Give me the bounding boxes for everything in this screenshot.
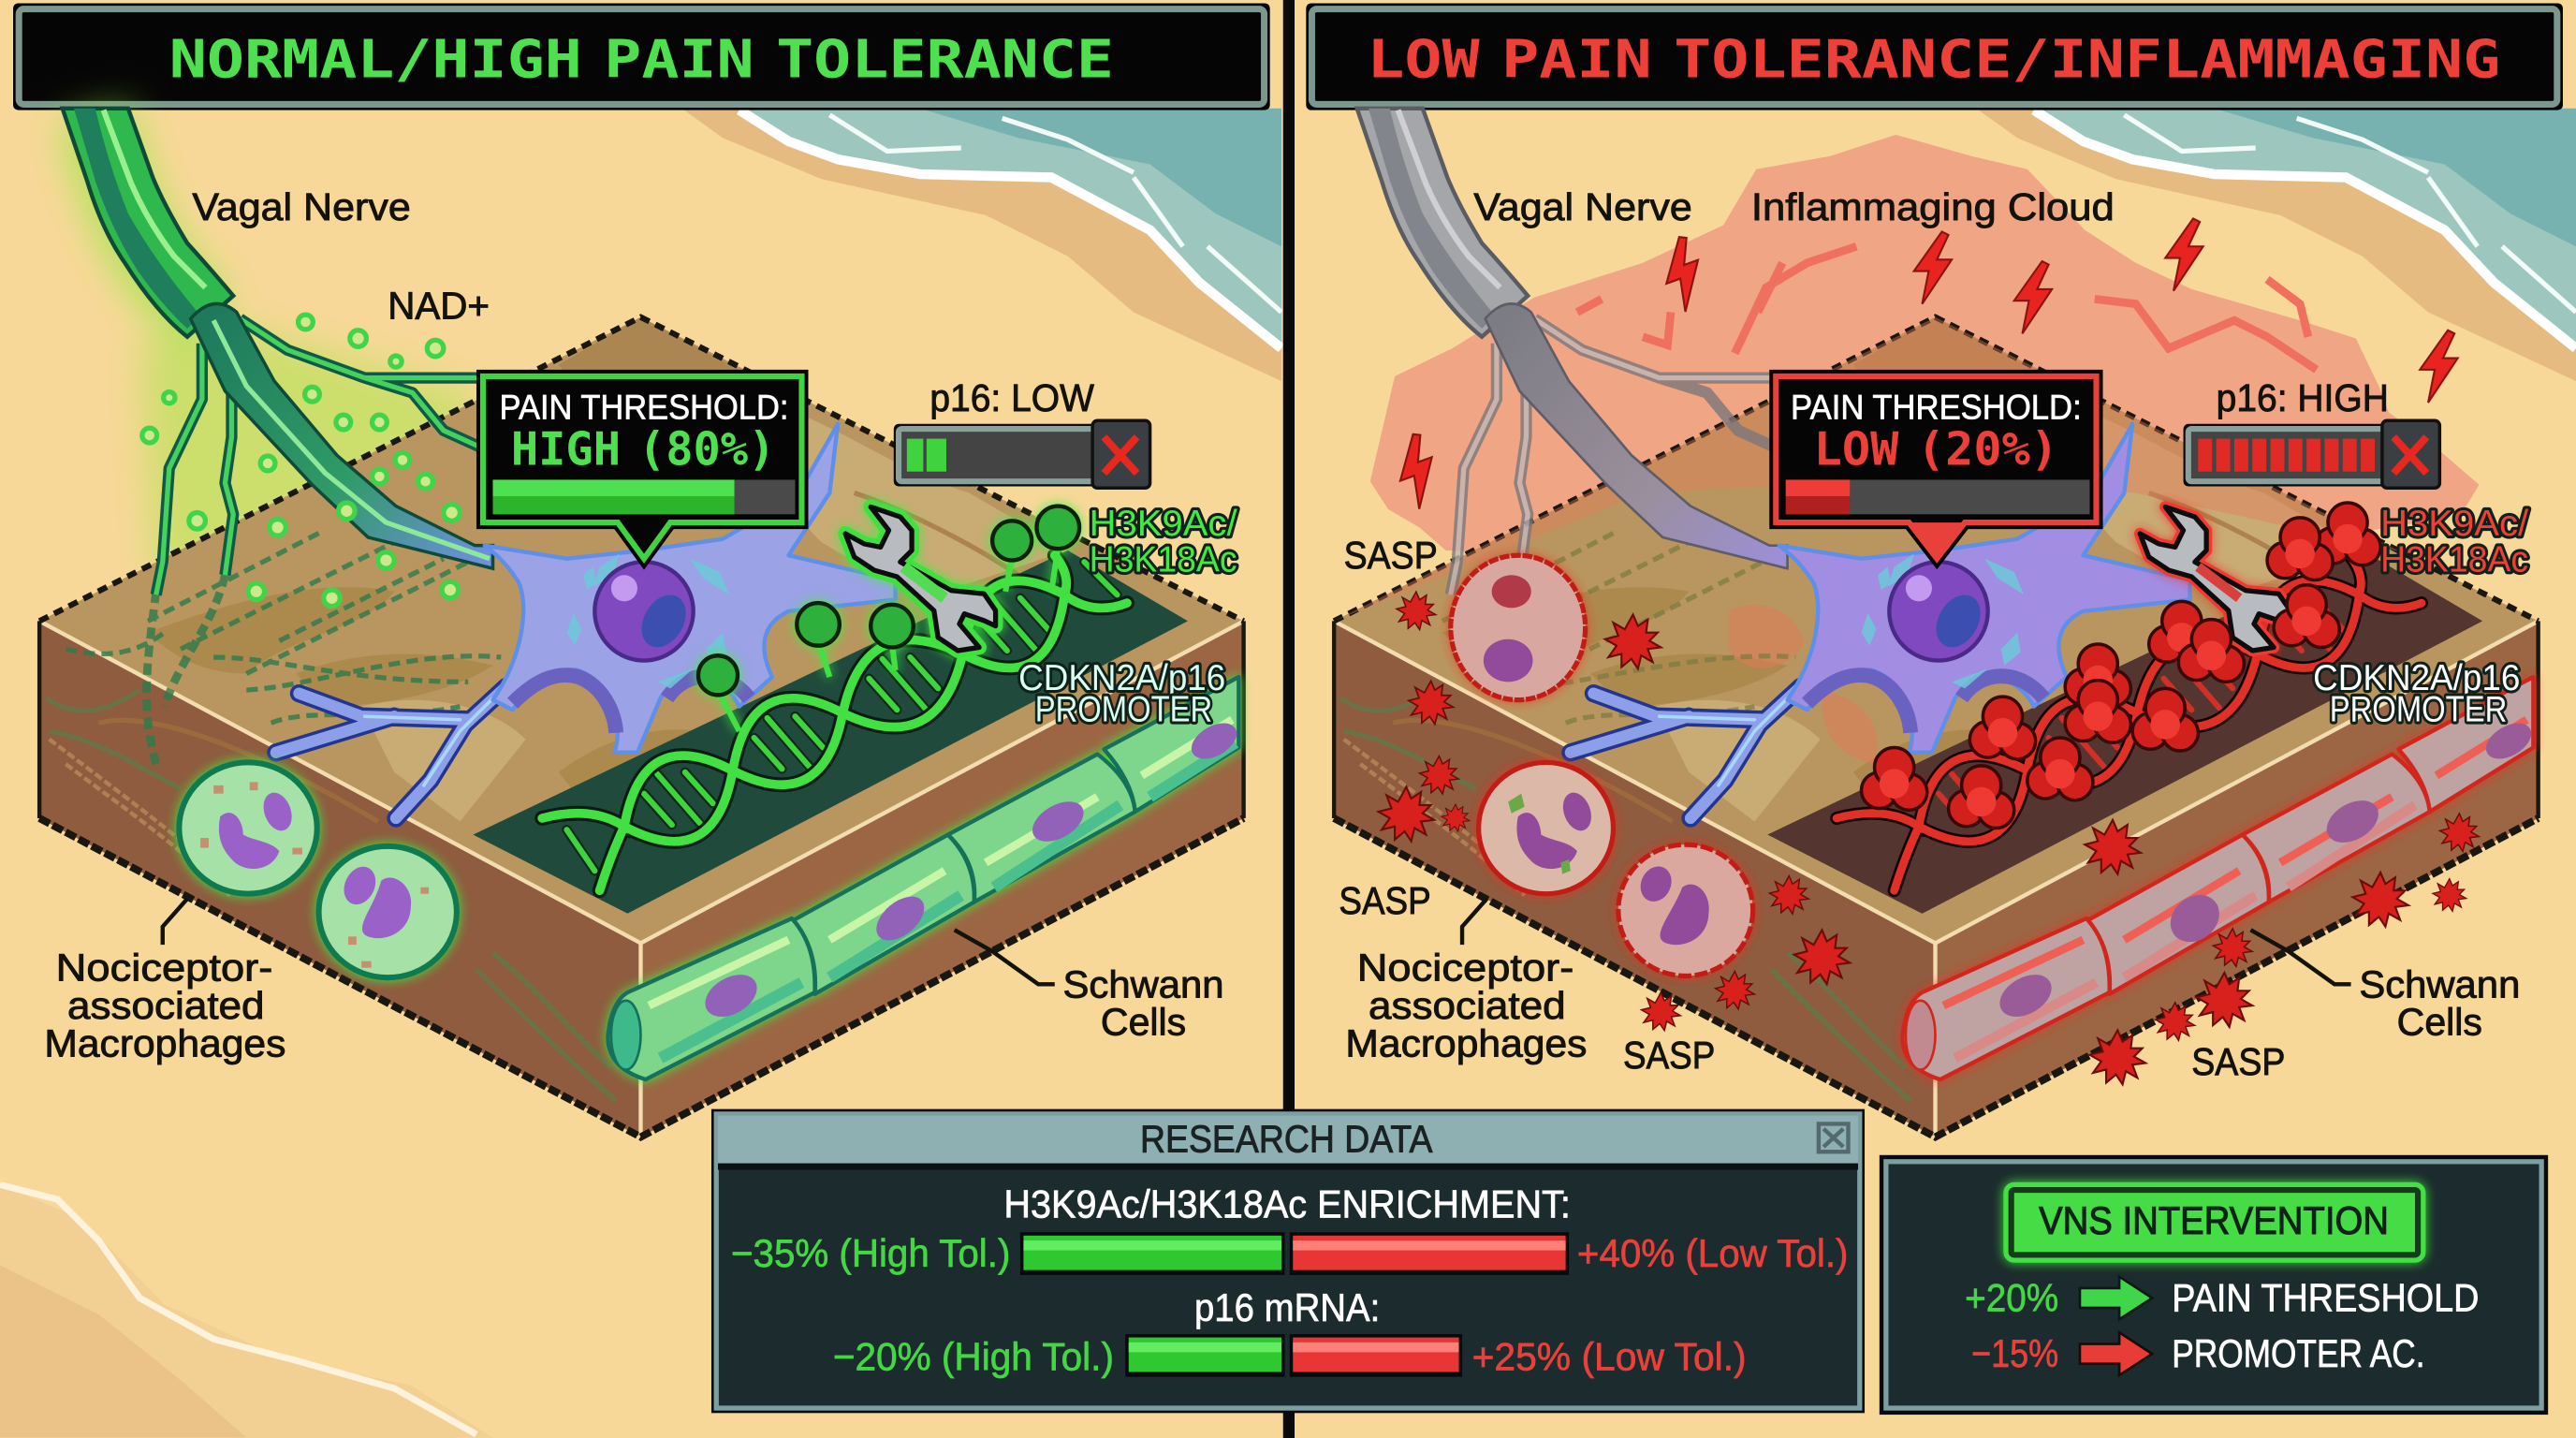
labels: left panel (44, 185, 1237, 1064)
labels: left panel: NAD+ (388, 284, 490, 327)
callout: pain threshold low (1776, 376, 2097, 559)
chart: p16 mRNA: p16 mRNA: (1194, 1285, 1380, 1329)
header: low pain tolerance (1306, 4, 2563, 110)
labels: right panel: Nociceptor- (1357, 946, 1573, 990)
chart: p16 mRNA: +25% (Low Tol.) (1472, 1335, 1747, 1379)
labels: right panel: Schwann (2359, 962, 2520, 1005)
chart: H3K9Ac/H3K18Ac enrichment: −35% (High Tol.) (731, 1231, 1010, 1275)
neuron (276, 424, 896, 818)
vagal nerve, degraded (1357, 109, 1788, 594)
gauge: p16 high: p16: HIGH (2217, 376, 2389, 419)
labels: right panel: CDKN2A/p16 (2313, 658, 2520, 698)
close icon (1819, 1123, 1848, 1152)
labels: right panel: SASP (1339, 879, 1431, 922)
macrophages (179, 762, 457, 977)
damaged DNA helix (1837, 555, 2422, 890)
labels: right panel: H3K9Ac/ (2380, 504, 2528, 544)
button: VNS intervention: VNS INTERVENTION (2039, 1198, 2389, 1242)
labels: right panel: Cells (2397, 1001, 2482, 1044)
panel title: RESEARCH DATA (1140, 1117, 1433, 1160)
panel: low pain tolerance / inflammaging (1306, 4, 2563, 1137)
labels: left panel: Cells (1101, 1001, 1186, 1044)
labels: right panel: Inflammaging Cloud (1751, 185, 2115, 228)
panel: normal/high pain tolerance (13, 4, 1270, 1137)
labels: left panel: CDKN2A/p16 (1018, 658, 1225, 698)
callout: pain threshold high (483, 376, 801, 559)
chart: H3K9Ac/H3K18Ac enrichment: +40% (Low Tol.) (1577, 1231, 1848, 1275)
histones (698, 506, 1079, 731)
labels: right panel: SASP (1623, 1034, 1715, 1077)
stat: pain threshold +20%: +20% (1965, 1276, 2058, 1320)
labels: left panel: Schwann (1063, 962, 1224, 1005)
Schwann cells, inflamed (1902, 677, 2538, 1079)
chart: p16 mRNA: −20% (High Tol.) (833, 1335, 1114, 1379)
neuron (1571, 424, 2190, 818)
stat: pain threshold +20% (1965, 1276, 2479, 1320)
panel: VNS intervention (1880, 1155, 2548, 1415)
stat: pain threshold +20%: PAIN THRESHOLD (2172, 1276, 2479, 1320)
labels: right panel: associated (1368, 984, 1566, 1027)
labels: right panel: H3K18Ac (2380, 540, 2528, 580)
labels: left panel: H3K9Ac/ (1090, 504, 1237, 544)
callout: pain threshold low: LOW (20%) (1814, 422, 2058, 477)
NAD+ particles (142, 315, 460, 607)
panel: research data (711, 1109, 1865, 1413)
labels: left panel: Macrophages (44, 1021, 285, 1064)
labels: right panel: PROMOTER (2330, 689, 2507, 729)
labels: left panel: associated (67, 984, 265, 1027)
tissue block (1334, 317, 2539, 1137)
chart: p16 mRNA (833, 1285, 1747, 1379)
histone clusters (1862, 503, 2380, 829)
labels: right panel: SASP (2191, 1040, 2285, 1083)
gauge: p16 low (894, 376, 1150, 488)
callout: pain threshold high: PAIN THRESHOLD: (500, 389, 788, 427)
chart: H3K9Ac/H3K18Ac enrichment: H3K9Ac/H3K18Ac ENRICHMENT: (1003, 1181, 1571, 1225)
header: normal high pain tolerance: NORMAL/HIGH PAIN TOLERANCE (169, 29, 1114, 90)
strata and veins on tissue (66, 533, 501, 764)
macrophages, senescent (1451, 555, 1753, 976)
labels: right panel: Macrophages (1345, 1021, 1587, 1064)
DNA helix: CDKN2A promoter (542, 555, 1127, 890)
gauge: p16 low: p16: LOW (929, 376, 1094, 419)
labels: right panel: Vagal Nerve (1473, 185, 1692, 228)
labels: left panel: Nociceptor- (56, 946, 272, 990)
tissue block (39, 317, 1244, 1137)
wrench (845, 506, 996, 651)
SASP particles (1379, 592, 2479, 1084)
callout: pain threshold high: HIGH (80%) (511, 422, 775, 477)
nerve glow halo (95, 115, 476, 592)
labels: left panel: Vagal Nerve (192, 185, 411, 228)
header: low pain tolerance: LOW PAIN TOLERANCE/INFLAMMAGING (1367, 29, 2500, 90)
inflammaging cloud (1370, 135, 2479, 559)
stat: promoter acetylation -15% (1971, 1331, 2425, 1375)
lightning bolts (1387, 218, 2458, 512)
button: VNS intervention (2006, 1184, 2423, 1260)
labels: right panel: SASP (1344, 534, 1438, 577)
wrench (2140, 506, 2291, 651)
gauge: p16 high (2184, 376, 2439, 488)
labels: right panel (1339, 185, 2528, 1083)
stat: promoter acetylation -15%: PROMOTER AC. (2172, 1331, 2425, 1375)
callout: pain threshold low: PAIN THRESHOLD: (1791, 389, 2082, 427)
vagal nerve (63, 109, 493, 594)
stat: promoter acetylation -15%: −15% (1971, 1331, 2058, 1375)
labels: left panel: PROMOTER (1035, 689, 1212, 729)
header: normal high pain tolerance (13, 4, 1270, 110)
chart: H3K9Ac/H3K18Ac enrichment (731, 1181, 1848, 1275)
Schwann cells (607, 677, 1243, 1079)
labels: left panel: H3K18Ac (1090, 540, 1237, 580)
